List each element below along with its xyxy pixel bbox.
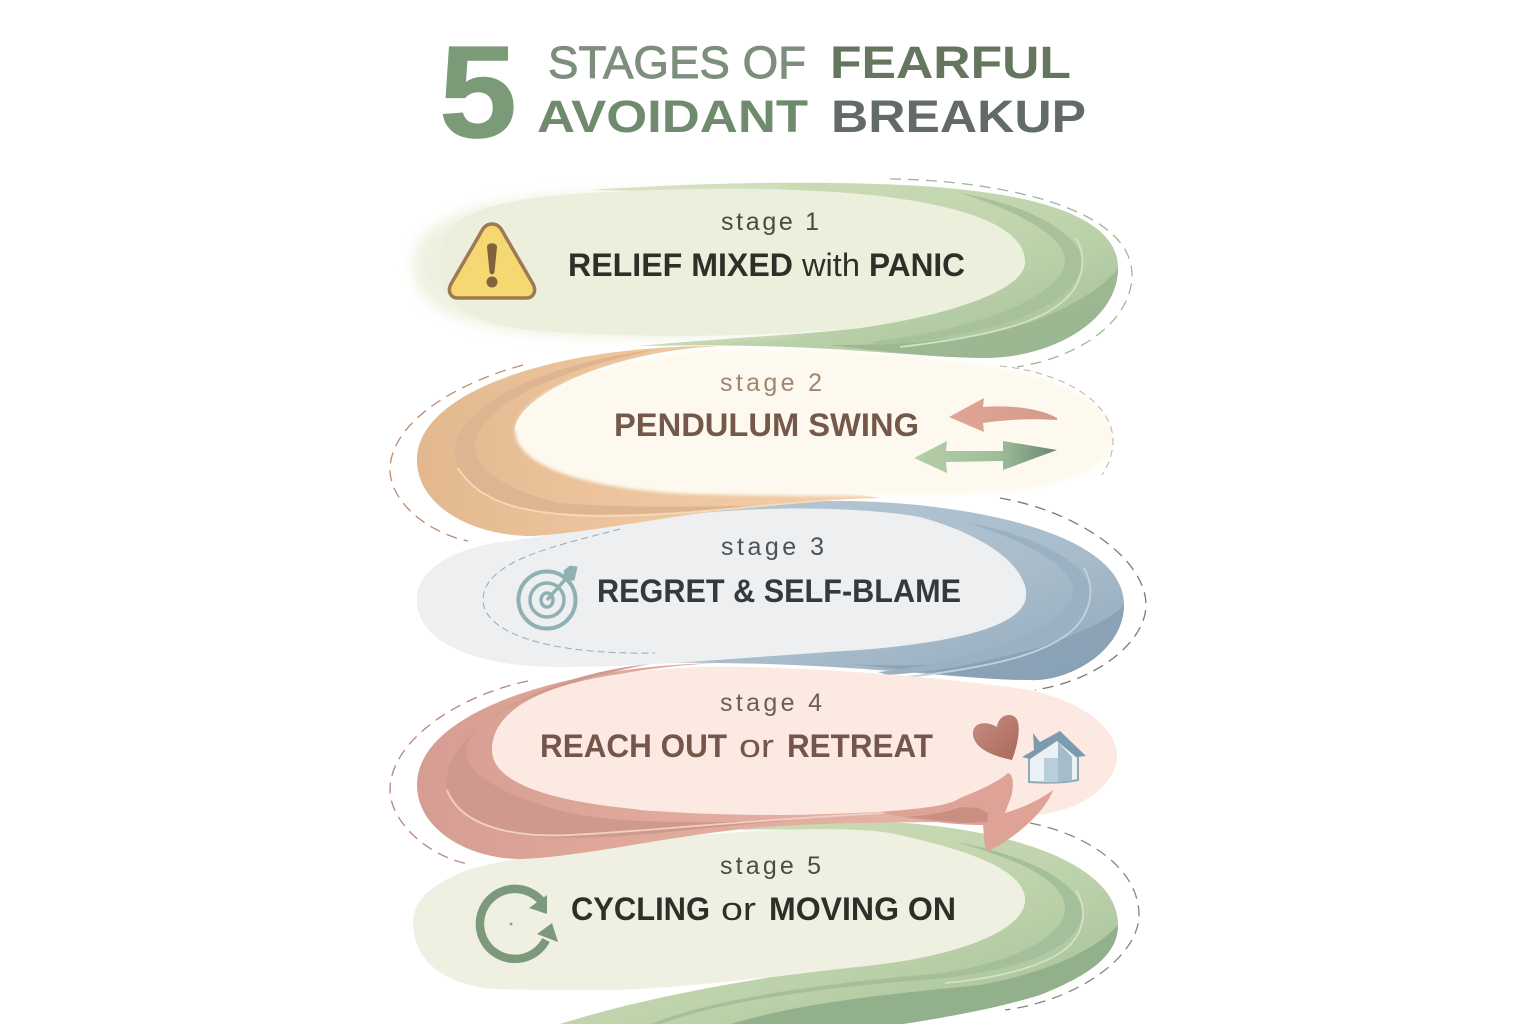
heading: stage 4: REACH OUT [540,728,727,764]
icon: target with arrow [518,566,577,628]
heading: stage 5: CYCLING [571,891,710,927]
heading: stage 3: REGRET & SELF-BLAME [597,573,961,609]
arrow fold [907,807,988,823]
heading: stage 4: RETREAT [787,728,933,764]
heading: stage 5: or [721,891,756,927]
title line 1: STAGES OF [548,37,806,88]
arrow: double green [914,441,1057,473]
dashed outline: stage 1 [890,179,1132,367]
heading: stage 1: with [801,247,860,283]
label: stage 5: stage 5 [720,852,821,880]
heading: stage 1: RELIEF MIXED [568,247,793,283]
label: stage 3: stage 3 [721,533,824,561]
icon: house [1022,731,1086,783]
panel: stage 4 [390,663,1117,864]
heading: stage 2: PENDULUM SWING [614,407,919,443]
dashed outline: stage 3 right [1000,498,1146,690]
dashed outline: stage 2 right [1000,366,1113,475]
arrow: left red [949,398,1057,432]
title line 1: FEARFUL [830,37,1071,88]
numeral 5: 5 [439,18,517,165]
icon: heart [973,715,1019,760]
label: stage 4: stage 4 [720,689,822,717]
icon: cycle arrows [480,889,558,959]
dashed outline: stage 5 [1005,823,1139,1010]
icon: warning triangle [449,224,535,298]
panel: stage 3 [417,498,1146,690]
title line 2: AVOIDANT [537,91,808,142]
dashed outline: stage 3 inner [483,529,655,653]
icon: pendulum arrows [914,398,1057,473]
heading: stage 4: or [739,728,774,764]
label: stage 2: stage 2 [720,369,822,397]
label: stage 1: stage 1 [721,208,819,236]
panel: stage 1 [413,179,1132,367]
arrow: reach out or retreat [880,773,1053,852]
title [439,18,1086,165]
heading: stage 5: MOVING ON [769,891,956,927]
panel: stage 2 [390,346,1113,541]
heading: stage 1: PANIC [869,247,965,283]
panel: stage 5 [413,820,1139,1024]
title line 2: BREAKUP [831,91,1086,142]
dashed outline: stage 4 [390,681,528,864]
dashed outline: stage 2 [390,365,523,541]
